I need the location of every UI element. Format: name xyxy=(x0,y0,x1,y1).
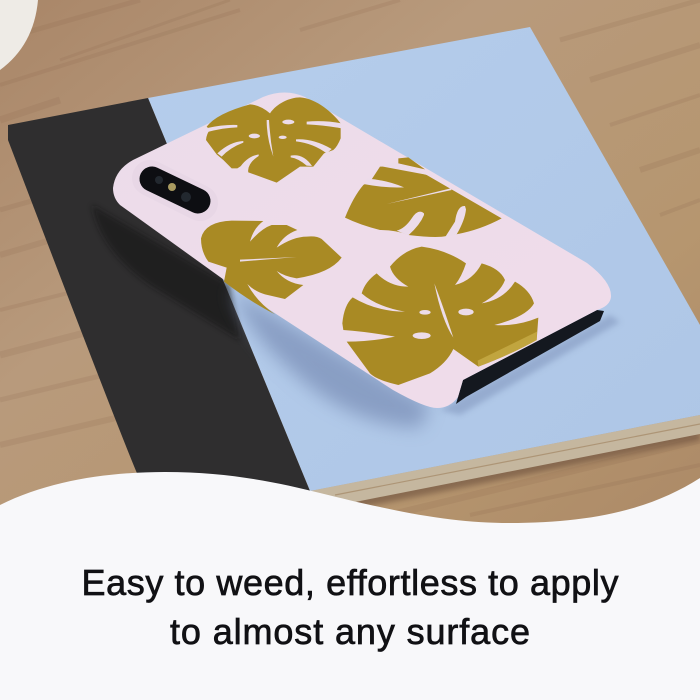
notebook black spine xyxy=(8,98,310,500)
monstera leaf: right xyxy=(345,157,502,237)
caption line 1: Easy to weed, effortless to apply xyxy=(82,562,618,603)
phone case xyxy=(113,92,611,408)
phone case shadows xyxy=(92,205,620,428)
monstera leaf: left xyxy=(201,221,342,314)
camera cutout xyxy=(150,176,200,203)
monstera leaf: bottom xyxy=(342,247,538,385)
notebook xyxy=(8,27,700,508)
notebook blue cover xyxy=(148,27,700,491)
wood table background xyxy=(0,0,700,560)
monstera leaf: top xyxy=(206,97,342,183)
white wave footer panel xyxy=(0,472,700,700)
phone visible at case opening xyxy=(456,310,604,404)
caption line 2: to almost any surface xyxy=(170,611,530,652)
notebook page edges xyxy=(310,415,700,502)
notebook shadow on table xyxy=(340,425,700,508)
